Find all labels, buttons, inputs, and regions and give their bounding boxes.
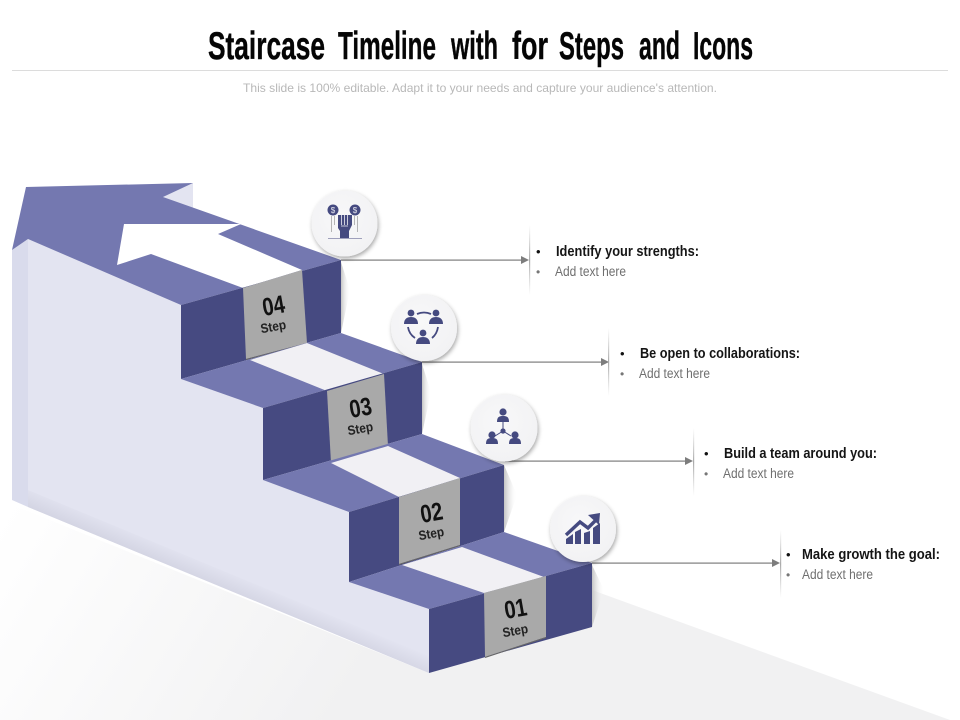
title: Steps <box>559 25 624 68</box>
step 03 label <box>346 391 375 438</box>
step 03 tread <box>181 333 422 408</box>
white arrow <box>117 224 302 288</box>
wall lower edge shading <box>28 490 429 673</box>
arrow notch <box>163 183 193 209</box>
icon: team network <box>470 394 538 462</box>
step 02 label: Step <box>417 524 446 543</box>
step 03 riser <box>263 362 422 480</box>
step 03 label: Step <box>346 419 375 438</box>
title: for <box>512 25 548 68</box>
text block: step 4: • <box>536 265 540 279</box>
step 04 tread with arrowhead <box>12 183 341 305</box>
text block: step 3 <box>620 345 800 381</box>
text block: step 1 <box>786 546 940 582</box>
step 02 label <box>417 496 446 543</box>
text block: step 4: • <box>536 244 541 259</box>
step 02 label: 02 <box>418 496 445 528</box>
title: Timeline <box>338 25 436 68</box>
title: Staircase <box>208 25 325 68</box>
step 02 riser <box>349 465 504 582</box>
text block: step 2: • <box>704 467 708 481</box>
text block: step 2: • <box>704 446 709 461</box>
step 02 white band <box>331 446 460 497</box>
connector 2 <box>505 428 694 496</box>
step 04 label: 04 <box>260 289 287 321</box>
text block: step 1: • <box>786 547 791 562</box>
connector 3 <box>422 328 609 396</box>
text block: step 3: • <box>620 367 624 381</box>
text block: step 4: Add text here <box>555 264 626 279</box>
step 01 label: 01 <box>502 592 529 624</box>
title: with <box>450 25 498 68</box>
step 04 riser <box>181 260 341 379</box>
step 02 tread <box>263 434 504 512</box>
text block: step 2 <box>704 445 877 481</box>
text block: step 4 <box>536 243 699 279</box>
connector 1 <box>592 530 781 598</box>
connector 4 <box>341 225 530 295</box>
text block: step 1: Add text here <box>802 567 873 582</box>
step 01 white band <box>402 547 544 593</box>
floor shadow <box>0 500 950 720</box>
icon: collaboration circle of people <box>391 295 457 361</box>
step 01 tread <box>349 532 592 609</box>
step 04 label: Step <box>259 317 288 336</box>
text block: step 3: • <box>620 346 625 361</box>
title: and <box>639 25 680 68</box>
wall side strip <box>12 239 28 507</box>
step 03 white band <box>250 343 384 391</box>
staircase <box>12 183 604 673</box>
icon: raised fist with coins <box>312 190 378 256</box>
icon: growth chart <box>550 496 616 562</box>
step 01 label: Step <box>501 621 530 640</box>
text block: step 4: Identify your strengths: <box>556 243 699 260</box>
subtitle: This slide is 100% editable. Adapt it to your needs and capture your audience's attention. <box>243 81 717 95</box>
text block: step 2: Add text here <box>723 466 794 481</box>
title: Icons <box>693 25 753 68</box>
text block: step 1: • <box>786 568 790 582</box>
text block: step 2: Build a team around you: <box>724 445 877 462</box>
step 01 riser <box>429 563 592 673</box>
step 01 label <box>501 592 530 640</box>
text block: step 3: Be open to collaborations: <box>640 345 800 362</box>
text block: step 1: Make growth the goal: <box>802 546 940 563</box>
wall face <box>28 239 429 673</box>
icon: raised fist with coins: $ <box>353 206 358 215</box>
header divider <box>12 70 948 71</box>
step 04 label <box>259 289 288 336</box>
title <box>208 25 753 68</box>
text block: step 3: Add text here <box>639 366 710 381</box>
side shadows <box>341 262 604 627</box>
icon: raised fist with coins: $ <box>331 206 336 215</box>
step 03 label: 03 <box>347 391 374 423</box>
